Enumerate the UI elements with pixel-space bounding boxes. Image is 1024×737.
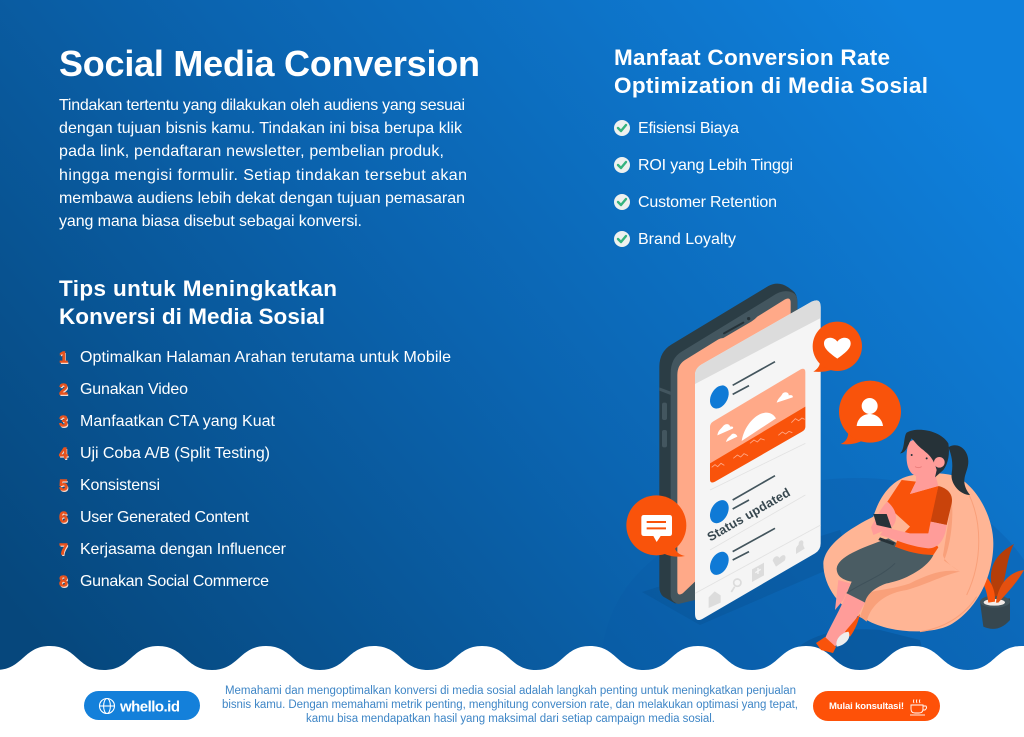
neck (910, 472, 938, 494)
phone inner screen (677, 299, 791, 595)
heading: benefits: Manfaat Conversion Rate (614, 45, 890, 70)
shoe (845, 614, 860, 637)
benefits check icons (614, 120, 630, 247)
intro paragraph: pada link, pendaftaran newsletter, pembelian produk, (59, 143, 444, 160)
benefits list: Efisiensi Biaya (638, 120, 739, 137)
intro paragraph: Tindakan tertentu yang dilakukan oleh audiens yang sesuai (59, 97, 465, 114)
footer text: kamu bisa mendapatkan hasil yang maksimal dari setiap campaign media sosial. (306, 713, 715, 725)
tips list: Konsistensi (80, 477, 160, 494)
tips number badges: 5 (59, 478, 68, 494)
status text: Status updated (705, 485, 793, 544)
intro paragraph: yang mana biasa disebut sebagai konversi. (59, 213, 362, 230)
app screen card (695, 300, 821, 620)
footer text (222, 685, 798, 725)
front shoe over wave (816, 637, 836, 653)
heading: tips (59, 276, 337, 329)
phone body (659, 284, 797, 604)
front leg (825, 593, 865, 647)
tips list: Gunakan Video (80, 381, 188, 398)
intro paragraph: dengan tujuan bisnis kamu. Tindakan ini bisa berupa klik (59, 120, 463, 137)
phone in hand (873, 514, 892, 528)
hair (900, 430, 949, 477)
logo pill (84, 691, 200, 720)
tips list: Gunakan Social Commerce (80, 573, 269, 590)
tips number badges: 5 (60, 479, 69, 496)
tips list: User Generated Content (80, 509, 250, 526)
ponytail (948, 445, 970, 495)
tips list (80, 349, 451, 590)
face details (911, 454, 913, 456)
tips number badges: 7 (59, 542, 68, 558)
benefits list: Brand Loyalty (638, 231, 736, 248)
speech bubble: comment (626, 495, 686, 557)
tips list: Uji Coba A/B (Split Testing) (80, 445, 270, 462)
heading: benefits (614, 45, 928, 98)
icon: globe (100, 698, 114, 714)
tips list: Manfaatkan CTA yang Kuat (80, 413, 276, 430)
cta button: Mulai konsultasi! (829, 701, 904, 712)
speech bubble: user (839, 381, 901, 444)
intro paragraph: hingga mengisi formulir. Setiap tindakan tersebut akan (59, 167, 467, 184)
arms (880, 522, 947, 548)
speech bubbles (626, 322, 901, 557)
title: Social Media Conversion (59, 43, 480, 84)
heading: benefits: Optimization di Media Sosial (614, 73, 928, 98)
tips number badges: 8 (60, 575, 69, 592)
torso (887, 480, 938, 555)
head (907, 439, 942, 477)
tips list: Optimalkan Halaman Arahan terutama untuk Mobile (80, 349, 451, 366)
post 3 (706, 549, 732, 578)
tips number badges: 4 (59, 446, 68, 462)
tips number badges (59, 350, 69, 592)
tips number badges: 8 (59, 574, 68, 590)
heading: tips: Konversi di Media Sosial (59, 304, 325, 329)
tips number badges: 1 (60, 351, 69, 368)
wave footer (0, 646, 1024, 737)
cta button (813, 691, 940, 721)
bean bag (823, 473, 993, 632)
woman (825, 430, 970, 647)
benefits list (638, 120, 793, 248)
tips number badges: 2 (60, 383, 69, 400)
benefits list: Customer Retention (638, 194, 777, 211)
back leg (835, 580, 851, 610)
intro paragraph (59, 97, 467, 230)
benefits list: ROI yang Lebih Tinggi (638, 157, 793, 174)
woman on bean bag (823, 430, 1024, 647)
tips number badges: 7 (60, 543, 69, 560)
logo pill: whello.id (119, 698, 180, 716)
floor shadow (600, 478, 1024, 680)
post image (710, 369, 805, 482)
speech bubble: heart (813, 322, 862, 372)
tips number badges: 2 (59, 382, 68, 398)
post 1 (706, 382, 732, 412)
post 2 (706, 497, 732, 526)
tips number badges: 6 (60, 511, 69, 528)
phone illustration (659, 284, 821, 620)
bottom nav icons (709, 591, 721, 608)
heading: tips: Tips untuk Meningkatkan (59, 276, 337, 301)
tips number badges: 3 (60, 415, 69, 432)
tips number badges: 4 (60, 447, 69, 464)
icon: coffee cup (910, 700, 927, 715)
tips number badges: 1 (59, 350, 68, 366)
shorts (837, 538, 933, 603)
intro paragraph: membawa audiens lebih dekat dengan tujuan pemasaran (59, 190, 465, 207)
tips number badges: 3 (59, 414, 68, 430)
tips list: Kerjasama dengan Influencer (80, 541, 287, 558)
footer text: bisnis kamu. Dengan memahami metrik penting, menghitung conversion rate, dan melakukan optimasi yang tepat, (222, 699, 798, 711)
plant (965, 544, 1024, 629)
speaker (724, 323, 743, 333)
footer text: Memahami dan mengoptimalkan konversi di media sosial adalah langkah penting untuk meningkatkan penjualan (225, 685, 796, 697)
tips number badges: 6 (59, 510, 68, 526)
